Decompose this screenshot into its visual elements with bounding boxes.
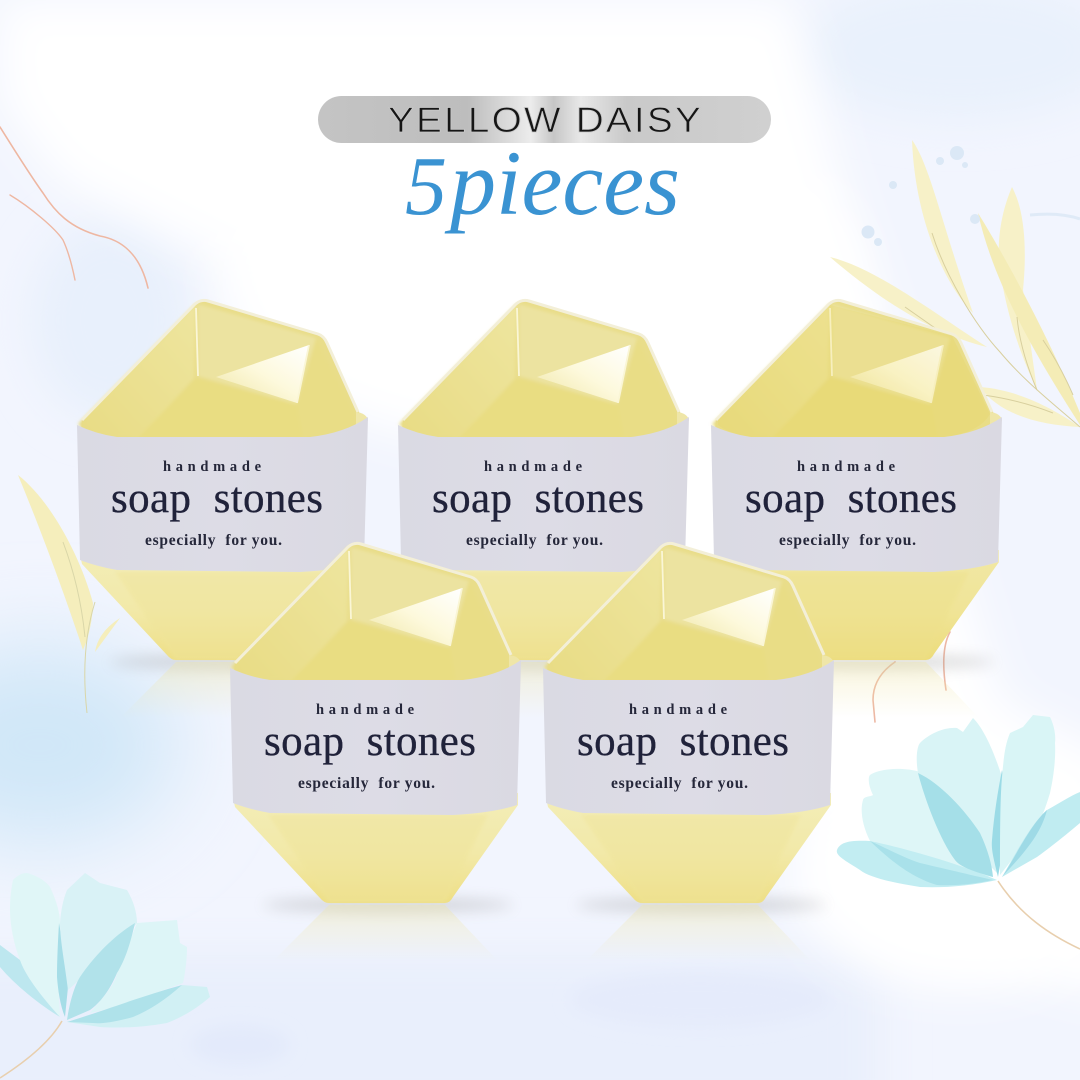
soap: back row centre: soap stones bbox=[432, 475, 644, 522]
soap: back row centre: handmade bbox=[484, 459, 583, 475]
title pill: YELLOW DAISY bbox=[388, 101, 703, 140]
soap: back row left: handmade bbox=[163, 459, 262, 475]
soap: front row left: soap stones bbox=[264, 718, 476, 765]
subtitle: pieces bbox=[444, 132, 680, 234]
soap: front row right: especially for you. bbox=[611, 775, 748, 792]
soap: front row right: handmade bbox=[629, 702, 728, 718]
leaves, top right bbox=[830, 140, 1080, 427]
leaf spray, left bbox=[18, 475, 120, 713]
soap: back row centre: especially for you. bbox=[466, 532, 603, 549]
soap: front row right: soap stones bbox=[577, 718, 789, 765]
soap: front row left: handmade bbox=[316, 702, 415, 718]
title pill bbox=[318, 96, 771, 143]
soap: back row right: handmade bbox=[797, 459, 896, 475]
soap: back row left bbox=[77, 300, 368, 718]
coral stems behind right soap bbox=[873, 632, 950, 722]
soap: back row left: especially for you. bbox=[145, 532, 282, 549]
soap: back row left: soap stones bbox=[111, 475, 323, 522]
flower, bottom left bbox=[0, 873, 210, 1078]
soap: front row right bbox=[543, 543, 834, 961]
soap: back row right: soap stones bbox=[745, 475, 957, 522]
soap: front row left bbox=[230, 543, 521, 961]
soap: back row right bbox=[711, 300, 1002, 718]
subtitle: 5 bbox=[405, 140, 468, 233]
soap: back row right: especially for you. bbox=[779, 532, 916, 549]
flower, bottom right bbox=[837, 715, 1080, 949]
soap: front row left: especially for you. bbox=[298, 775, 435, 792]
decorative coral stems, top left bbox=[0, 127, 148, 288]
soap: back row centre bbox=[398, 300, 689, 718]
